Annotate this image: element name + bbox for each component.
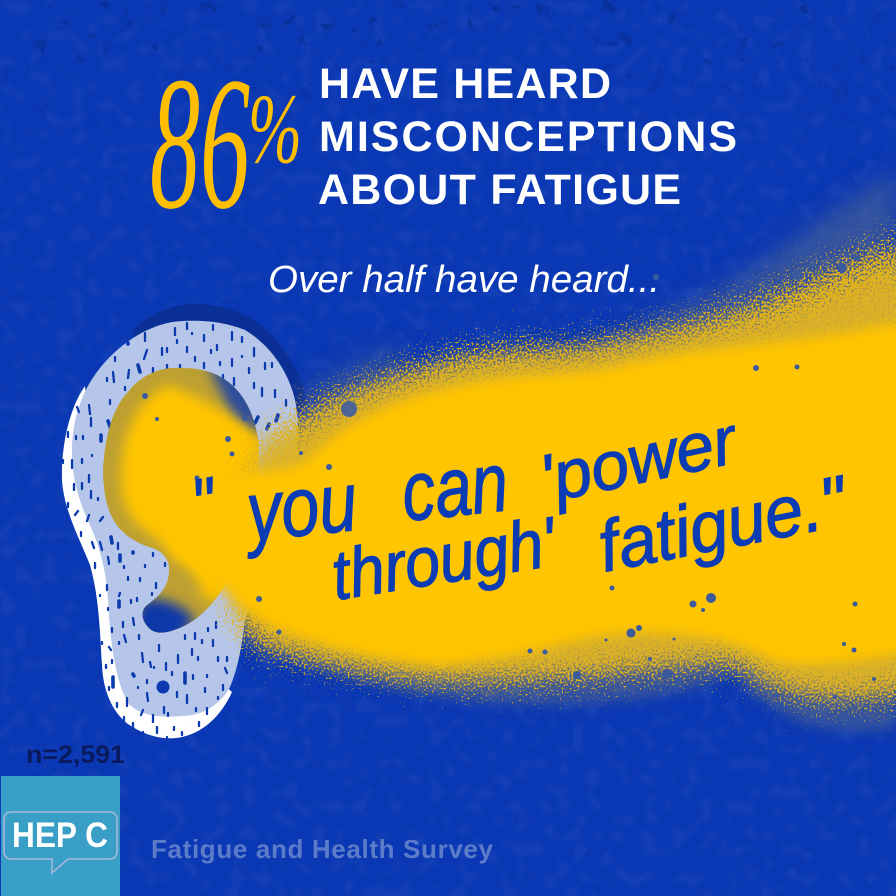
ear canal concha — [103, 368, 259, 633]
title: ABOUT FATIGUE — [318, 166, 681, 214]
ear dashes — [63, 323, 286, 739]
background texture — [4, 0, 896, 96]
percentage figure: % — [248, 73, 302, 184]
gold haze — [225, 265, 896, 692]
yellow spray cloud — [170, 225, 896, 705]
subheading: Over half have heard... — [268, 259, 660, 301]
handwritten quote: through' — [326, 502, 563, 615]
survey name: Fatigue and Health Survey — [151, 834, 494, 864]
title — [318, 60, 737, 214]
handwritten quote: 'power — [533, 402, 745, 518]
sprayed edge — [225, 225, 896, 705]
logo: Hep C speech bubble — [1, 776, 120, 896]
ear lilac body — [72, 321, 298, 717]
ear outer white — [62, 386, 232, 738]
blue paint specks — [142, 255, 876, 699]
handwritten quote: fatigue." — [592, 461, 856, 588]
solid yellow core — [170, 320, 896, 666]
percentage figure: 86 — [150, 39, 250, 249]
title: MISCONCEPTIONS — [319, 113, 737, 161]
sample size: n=2,591 — [26, 741, 125, 769]
handwritten quote — [186, 402, 856, 615]
dark ear shadow — [132, 304, 306, 420]
title: HAVE HEARD — [319, 60, 611, 108]
handwritten quote: you — [238, 454, 361, 559]
handwritten quote: " — [186, 463, 224, 546]
spray haze — [245, 170, 896, 731]
handwritten quote: can — [397, 434, 512, 539]
ear — [62, 321, 298, 739]
logo: Hep C speech bubble: HEP C — [12, 816, 108, 855]
